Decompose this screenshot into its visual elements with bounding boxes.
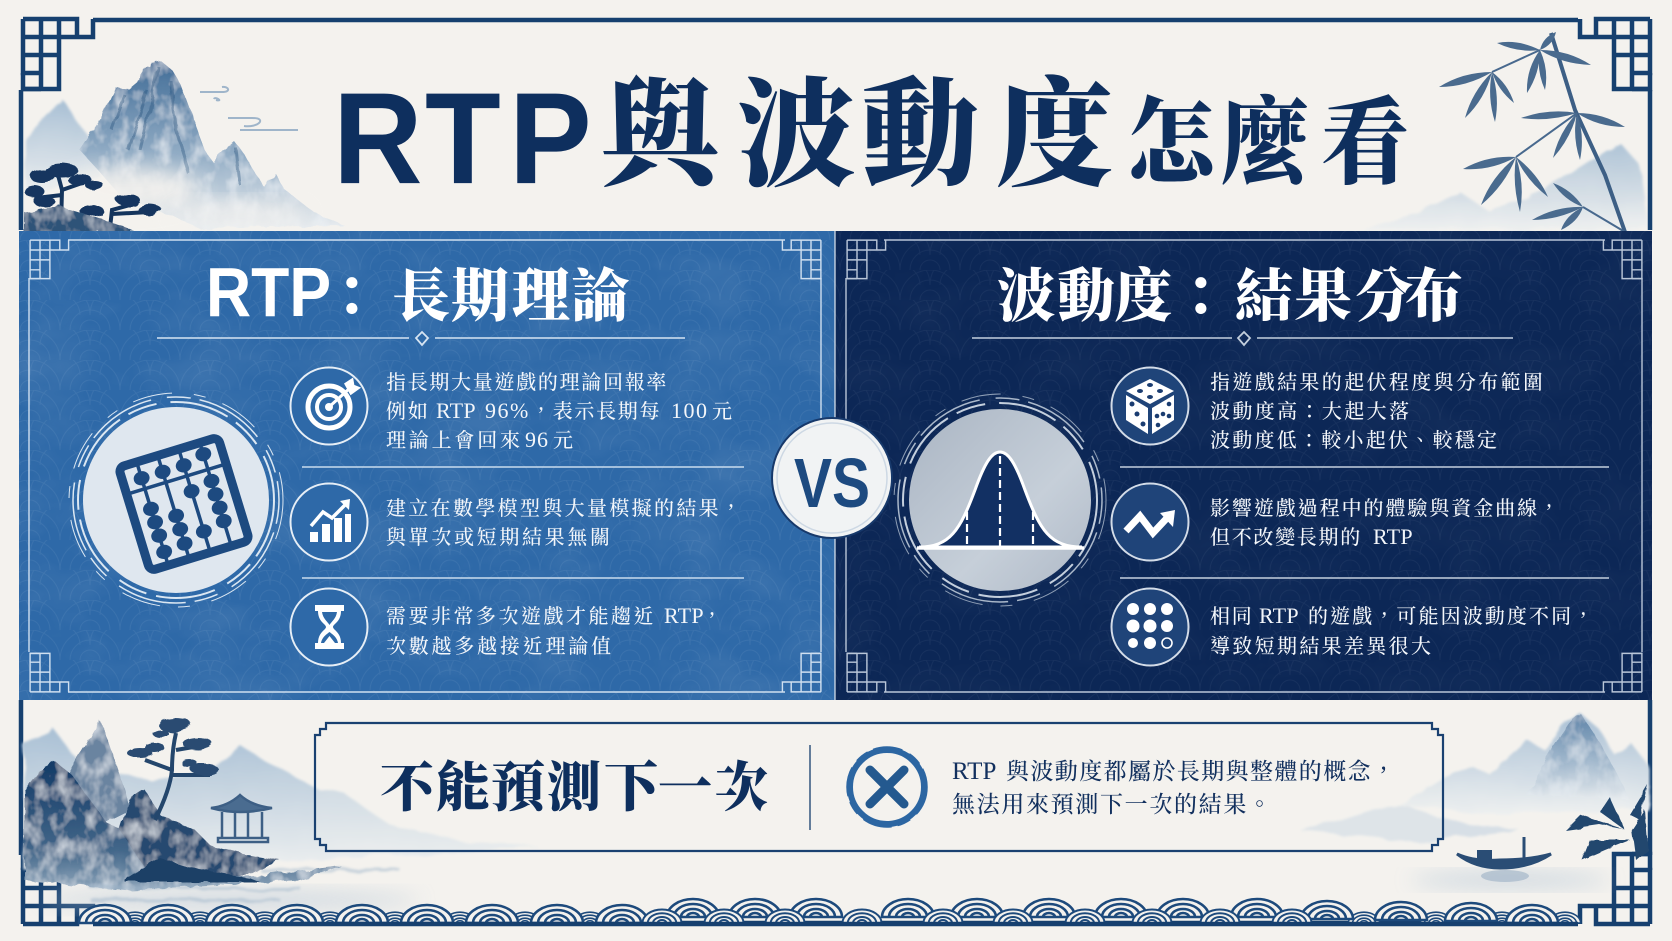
item 1 text: 96% bbox=[485, 398, 530, 423]
panel: volatility distribution bbox=[835, 231, 1652, 700]
icon: growth bars bbox=[290, 484, 368, 560]
item 3 text bbox=[1210, 603, 1595, 658]
item 1 text: ，表示長期每 bbox=[531, 399, 661, 423]
item 1 text bbox=[1210, 371, 1543, 452]
top-left mountain landscape bbox=[24, 60, 345, 232]
VS badge: VS bbox=[794, 444, 870, 522]
bottom-left landscape bbox=[24, 718, 540, 909]
item 1 text: 指長期大量遊戲的理論回報率 bbox=[386, 371, 668, 394]
panel separator bbox=[834, 231, 836, 700]
item 1 text: 指遊戲結果的起伏程度與分布範圍 bbox=[1210, 371, 1543, 394]
item 3 text: 相同 bbox=[1210, 605, 1253, 628]
item 1 text: 波動度高：大起大落 bbox=[1210, 400, 1409, 423]
main title: 怎麼看 bbox=[1127, 68, 1409, 204]
icon: zigzag arrow bbox=[1112, 484, 1188, 560]
item 3 text bbox=[386, 603, 724, 658]
item 2 text: 但不改變長期的 bbox=[1210, 526, 1362, 549]
panel: RTP long-term theory bbox=[19, 231, 835, 700]
main title: 與波動度 bbox=[601, 40, 1113, 210]
panel frame bbox=[29, 240, 821, 692]
item 3 text: 次數越多越接近理論值 bbox=[386, 635, 611, 658]
item 3 text: RTP bbox=[664, 603, 704, 628]
main title bbox=[333, 40, 1409, 211]
pavilion bbox=[211, 795, 272, 842]
item 1 text bbox=[386, 371, 734, 452]
box text: 與波動度都屬於長期與整體的概念， bbox=[1006, 759, 1396, 784]
top-right bamboo and hills bbox=[1360, 32, 1650, 232]
item 1 text: 元 bbox=[712, 400, 734, 423]
item 3 text: 導致短期結果差異很大 bbox=[1210, 635, 1431, 658]
icon: bell curve medallion bbox=[894, 394, 1106, 606]
panel frame bbox=[846, 240, 1642, 692]
icon: target bbox=[290, 368, 368, 444]
item 2 text bbox=[386, 497, 741, 549]
box text: 無法用來預測下一次的結果。 bbox=[952, 792, 1271, 817]
item 3 text: ， bbox=[702, 606, 724, 628]
panel heading: ：長期理論 bbox=[323, 249, 629, 333]
item 3 text: 需要非常多次遊戲才能趨近 bbox=[386, 605, 656, 628]
item 3 text: RTP bbox=[1259, 603, 1299, 628]
row divider bbox=[302, 467, 744, 578]
item 2 text: 影響遊戲過程中的體驗與資金曲線， bbox=[1210, 497, 1559, 520]
icon: dice bbox=[1112, 368, 1188, 444]
panel heading: RTP bbox=[206, 253, 331, 331]
bamboo sprig bbox=[1565, 785, 1648, 860]
heading divider bbox=[157, 332, 685, 345]
icon: abacus medallion bbox=[69, 393, 283, 607]
icon: dot grid bbox=[1112, 588, 1188, 666]
boat bbox=[1457, 837, 1551, 882]
icon: cross mark bbox=[847, 747, 927, 827]
item 1 text: 96 bbox=[525, 427, 549, 452]
bottom-right landscape bbox=[1300, 713, 1648, 887]
item 1 text: 波動度低：較小起伏、較穩定 bbox=[1210, 429, 1497, 452]
heading divider bbox=[972, 332, 1513, 345]
main title: RTP bbox=[333, 65, 592, 211]
conclusion box bbox=[315, 723, 1443, 851]
item 2 text bbox=[1210, 497, 1559, 549]
item 2 text: 建立在數學模型與大量模擬的結果， bbox=[386, 497, 741, 520]
item 1 text: 100 bbox=[671, 398, 708, 423]
panel heading: 波動度：結果分布 bbox=[997, 249, 1463, 333]
VS badge bbox=[772, 418, 892, 538]
item 1 text: RTP bbox=[436, 398, 476, 423]
box divider bbox=[809, 745, 811, 830]
item 2 text: RTP bbox=[1373, 524, 1413, 549]
item 2 text: 與單次或短期結果無關 bbox=[386, 526, 610, 549]
icon: hourglass bbox=[290, 588, 368, 666]
row divider bbox=[1120, 467, 1609, 578]
item 1 text: 例如 bbox=[386, 400, 429, 423]
wave border bbox=[79, 899, 1581, 924]
item 1 text: 理論上會回來 bbox=[386, 429, 523, 452]
box heading: 不能預測下一次 bbox=[380, 745, 768, 822]
item 3 text: 的遊戲，可能因波動度不同， bbox=[1308, 605, 1595, 628]
item 1 text: 元 bbox=[553, 429, 575, 452]
box text: RTP bbox=[952, 758, 996, 785]
box text bbox=[952, 758, 1396, 817]
